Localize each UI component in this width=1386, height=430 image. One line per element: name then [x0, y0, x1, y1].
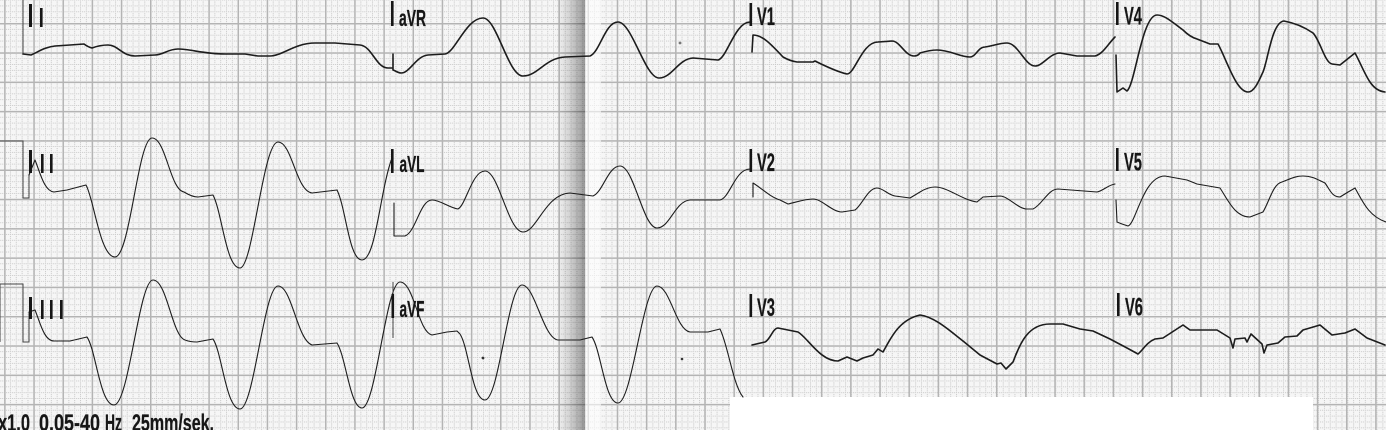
- lead label: V6: V6: [1125, 294, 1143, 322]
- lead label: aVL: [391, 149, 424, 177]
- lead label: V3: V3: [757, 294, 775, 322]
- calibration pulses: [0, 0, 29, 342]
- trace: lead aVL: [394, 166, 750, 236]
- trace: lead aVR: [393, 18, 750, 78]
- lead label: V2: [750, 149, 775, 177]
- trace: lead I: [23, 43, 392, 68]
- lead label: V5: [1116, 148, 1142, 176]
- trace: leads V3 and V6: [752, 315, 1385, 369]
- lead label: aVL: aVL: [400, 151, 424, 177]
- trace: lead V5: [1116, 176, 1386, 226]
- lead label: aVF: [392, 294, 424, 322]
- lead label: V1: V1: [757, 3, 775, 31]
- lead label: III: [29, 297, 63, 319]
- lead label: aVR: [391, 1, 426, 31]
- paper fold shadow: [556, 0, 601, 430]
- lead label: V6: [1117, 293, 1143, 322]
- lead label: V4: V4: [1124, 2, 1142, 30]
- lead label: aVR: aVR: [399, 5, 426, 31]
- white blank area at bottom: [730, 397, 1313, 430]
- lead label: V4: [1116, 2, 1142, 30]
- aVF lead marker: [392, 282, 394, 338]
- lead label: V3: [750, 294, 775, 322]
- trace: lead V4: [1116, 15, 1385, 92]
- trace: lead II: [29, 138, 392, 268]
- trace: lead V2: [753, 183, 1115, 212]
- lead label: V1: [750, 3, 775, 31]
- paper specks: [482, 42, 683, 360]
- trace: leads III and aVF: [29, 280, 743, 409]
- lead label: aVF: aVF: [400, 296, 424, 322]
- settings caption: [0, 410, 214, 430]
- lead label: V5: V5: [1124, 148, 1142, 176]
- lead label: I: [29, 4, 43, 27]
- lead label: V2: V2: [757, 149, 775, 177]
- lead label: II: [29, 150, 53, 173]
- trace: lead V1: [752, 35, 1115, 74]
